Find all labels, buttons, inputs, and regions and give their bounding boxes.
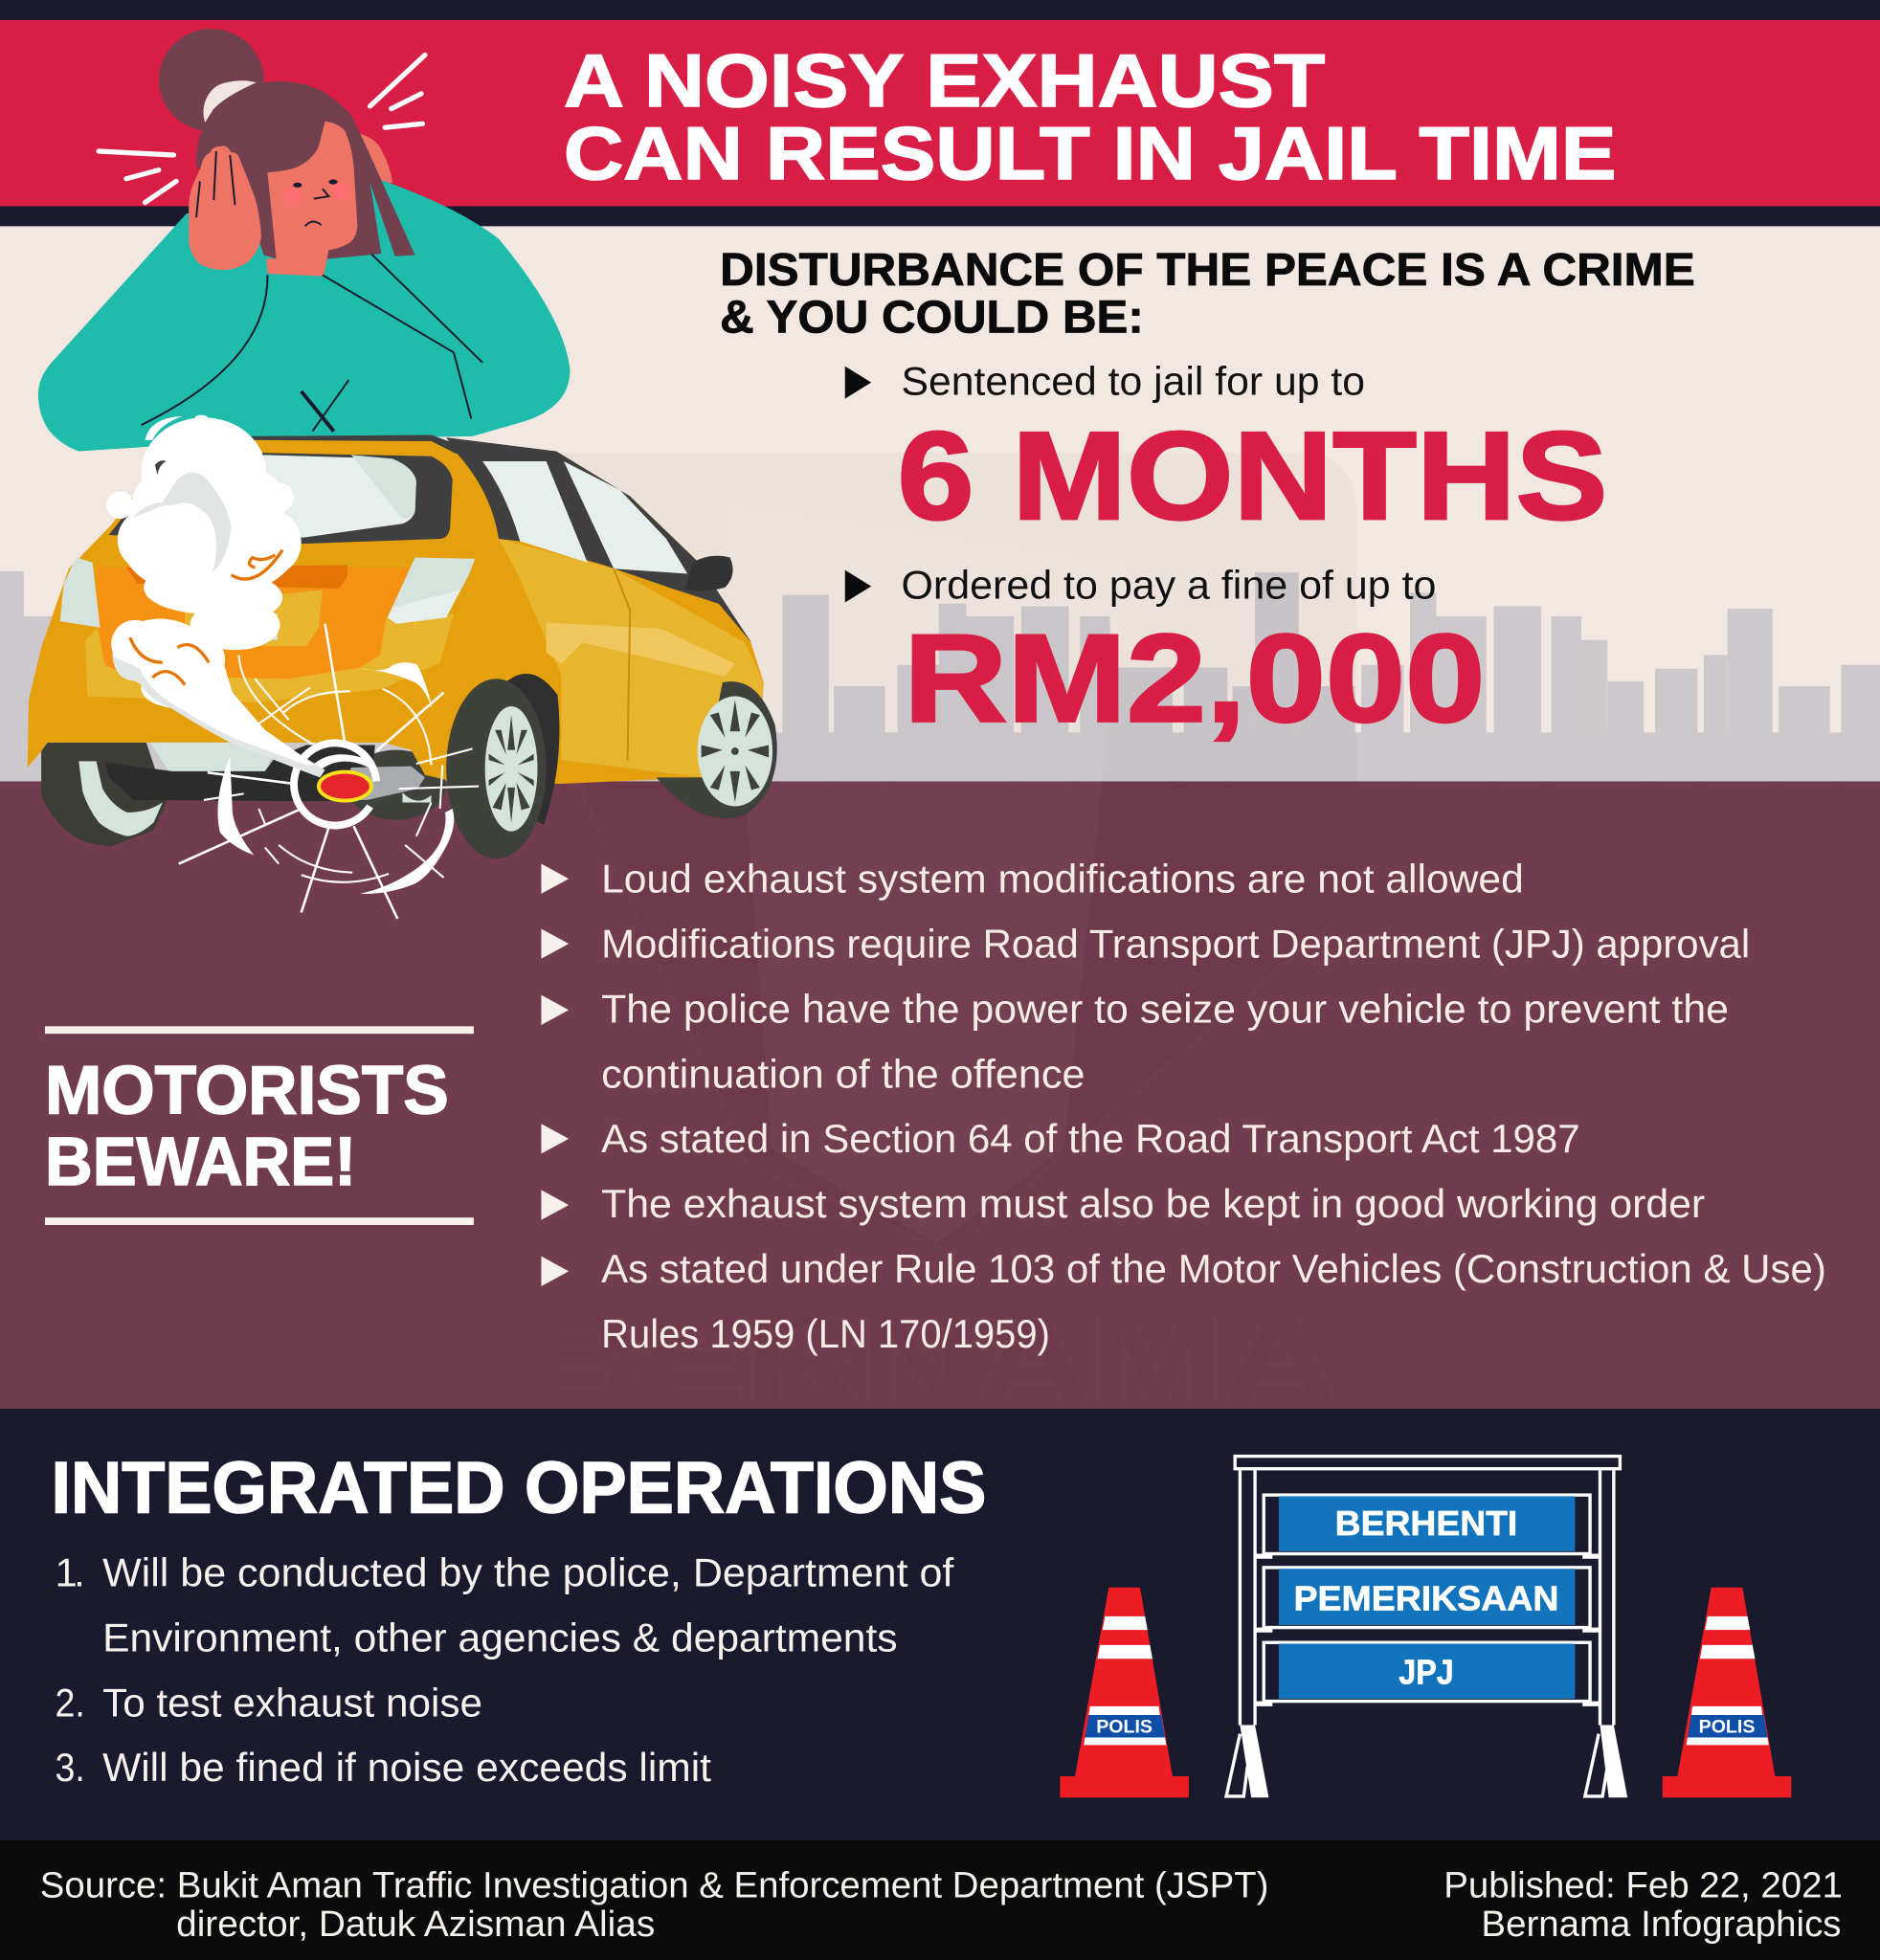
- jail figure: 6 MONTHS: [898, 406, 1607, 546]
- wing mirror: [685, 556, 733, 590]
- smoke inner shadow: [132, 472, 232, 572]
- watermark: BERNAMA: [525, 1289, 1337, 1429]
- face: [266, 122, 357, 277]
- orange smoke swirls: [130, 550, 282, 685]
- title: CAN RESULT IN JAIL TIME: [564, 111, 1616, 195]
- licence plate: [197, 613, 278, 640]
- rule text: continuation of the offence: [601, 1051, 1085, 1096]
- rule: [45, 1217, 474, 1225]
- hair bun: [159, 29, 264, 131]
- penalty: fine: [845, 563, 1485, 748]
- bun band: [203, 80, 257, 122]
- fine label: Ordered to pay a fine of up to: [902, 563, 1436, 608]
- smoke wisp: [145, 416, 183, 440]
- front rim: [698, 697, 772, 806]
- heading: disturbance of the peace: [720, 244, 1695, 343]
- illustration: right traffic cone: POLIS: [1699, 1716, 1755, 1737]
- list: integrated operations: 3.: [55, 1745, 85, 1790]
- list: integrated operations: [55, 1549, 954, 1790]
- smoke lower shadow: [113, 657, 188, 712]
- far rim sliver: [402, 792, 432, 803]
- sign: pemeriksaan: PEMERIKSAAN: [1294, 1578, 1558, 1617]
- smoke puffs: [106, 417, 315, 765]
- illustration: left traffic cone: [1060, 1588, 1189, 1797]
- left rim crescent: [78, 761, 163, 836]
- illustration: right traffic cone: [1663, 1588, 1791, 1797]
- rear window surround: [109, 453, 453, 544]
- side highlight: [547, 622, 735, 677]
- heading: BEWARE!: [45, 1124, 356, 1200]
- list: exhaust rules: [541, 857, 1826, 1356]
- heading: disturbance of the peace: DISTURBANCE OF THE PEACE IS A CRIME: [720, 244, 1695, 296]
- frame: [1226, 1457, 1620, 1796]
- side window one: [482, 461, 588, 563]
- rear right tyre: [446, 679, 547, 858]
- jail label: Sentenced to jail for up to: [902, 359, 1365, 404]
- rule: [45, 1026, 474, 1034]
- rule text: Modifications require Road Transport Department (JPJ) approval: [601, 921, 1750, 966]
- rule text: Rules 1959 (LN 170/1959): [601, 1311, 1050, 1356]
- rule text: [601, 857, 1826, 1356]
- rule text: Loud exhaust system modifications are not allowed: [601, 857, 1524, 902]
- orange tail panel: [97, 568, 412, 679]
- sweater: [38, 180, 570, 452]
- rule text: The exhaust system must also be kept in good working order: [601, 1181, 1705, 1226]
- sign: berhenti: [1279, 1496, 1575, 1551]
- bullet: [845, 367, 871, 399]
- list: integrated operations: To test exhaust noise: [102, 1680, 482, 1725]
- burst shards: [217, 662, 454, 894]
- lower boot panel: [85, 613, 454, 702]
- rule text: As stated under Rule 103 of the Motor Vehicles (Construction & Use): [601, 1246, 1826, 1291]
- exhaust flame: [319, 772, 371, 801]
- penalty: jail: [845, 359, 1607, 546]
- source credit: Source: Bukit Aman Traffic Investigation & Enforcement Department (JSPT): [40, 1866, 1268, 1906]
- rear window shade: [351, 455, 416, 519]
- exhaust pipe: [338, 767, 425, 800]
- list: integrated operations: Will be fined if noise exceeds limit: [102, 1745, 711, 1790]
- noise lines: [99, 55, 425, 203]
- underbody: [105, 745, 375, 801]
- rear right rim: [485, 706, 538, 832]
- rear window glass: [188, 455, 416, 538]
- eyes, nose and mouth: [293, 179, 338, 226]
- title: A NOISY EXHAUST: [564, 38, 1325, 122]
- publication credit: Bernama Infographics: [1481, 1904, 1842, 1945]
- hidden far tyre: [347, 750, 446, 820]
- skyline: [0, 571, 1880, 781]
- cheeks: [282, 187, 302, 207]
- source credit: [40, 1866, 1268, 1945]
- sign: berhenti: BERHENTI: [1335, 1503, 1517, 1543]
- roof edge: [246, 435, 480, 454]
- side window frame: [446, 437, 751, 642]
- sign: pemeriksaan: [1279, 1569, 1575, 1625]
- hand: [189, 145, 261, 270]
- list: integrated operations: Environment, other agencies & departments: [102, 1615, 898, 1659]
- list: integrated operations: 2.: [55, 1680, 85, 1725]
- licence plate panel: [185, 590, 323, 646]
- exhaust ring inner fragments: [312, 754, 375, 772]
- crack lines: [179, 624, 479, 919]
- tail light strip: [126, 565, 347, 589]
- smoke tail shadow: [142, 632, 325, 777]
- illustration: woman covering her ears: [38, 29, 570, 452]
- left tyre: [41, 743, 167, 846]
- left tail light: [60, 558, 100, 628]
- sign: jpj: JPJ: [1399, 1652, 1454, 1691]
- heading: integrated operations: INTEGRATED OPERATIONS: [52, 1447, 986, 1528]
- front rim spokes: [702, 700, 769, 803]
- watermark: [525, 453, 1356, 1429]
- fine figure: RM2,000: [904, 609, 1485, 748]
- illustration: roadblock sign: [1226, 1457, 1627, 1797]
- far hand: [360, 134, 392, 188]
- heading: [45, 1053, 449, 1200]
- title: [564, 38, 1616, 195]
- front tyre: [657, 681, 777, 818]
- list: integrated operations: Will be conducted by the police, Department of: [102, 1549, 954, 1594]
- rear right spokes: [489, 715, 534, 822]
- door line: [614, 568, 630, 760]
- panel: motorists beware: [45, 1026, 474, 1225]
- source credit: director, Datuk Azisman Alias: [176, 1904, 655, 1945]
- heading: disturbance of the peace: & YOU COULD BE:: [720, 291, 1144, 343]
- illustration: yellow car: [28, 380, 777, 919]
- dark gaps in smoke: [155, 460, 167, 475]
- sign: jpj: [1279, 1644, 1575, 1699]
- rule text: The police have the power to seize your vehicle to prevent the: [601, 986, 1729, 1031]
- bumper light strip: [150, 743, 278, 771]
- publication credit: Published: Feb 22, 2021: [1444, 1866, 1843, 1906]
- hair: [196, 81, 415, 258]
- rule text: As stated in Section 64 of the Road Transport Act 1987: [601, 1116, 1580, 1161]
- right tail light highlight: [388, 590, 460, 624]
- smoke cloud: [106, 415, 325, 777]
- exhaust burst ring: [294, 743, 376, 826]
- dark wheel arch: [490, 674, 559, 825]
- bullets: [541, 864, 569, 1286]
- list: integrated operations: 1.: [55, 1549, 85, 1594]
- right tail light: [388, 558, 475, 624]
- publication credit: [1444, 1866, 1843, 1945]
- side panel: [499, 539, 764, 777]
- finger lines: [196, 151, 235, 217]
- legs: [1240, 1725, 1268, 1797]
- sweater fold lines: [142, 254, 482, 425]
- bullet: [845, 570, 871, 603]
- antenna: [302, 380, 348, 432]
- illustration: left traffic cone: POLIS: [1096, 1716, 1153, 1737]
- heading: MOTORISTS: [45, 1053, 449, 1129]
- car body: [28, 437, 764, 784]
- side window two: [564, 461, 687, 574]
- smoke fleck: [195, 415, 208, 420]
